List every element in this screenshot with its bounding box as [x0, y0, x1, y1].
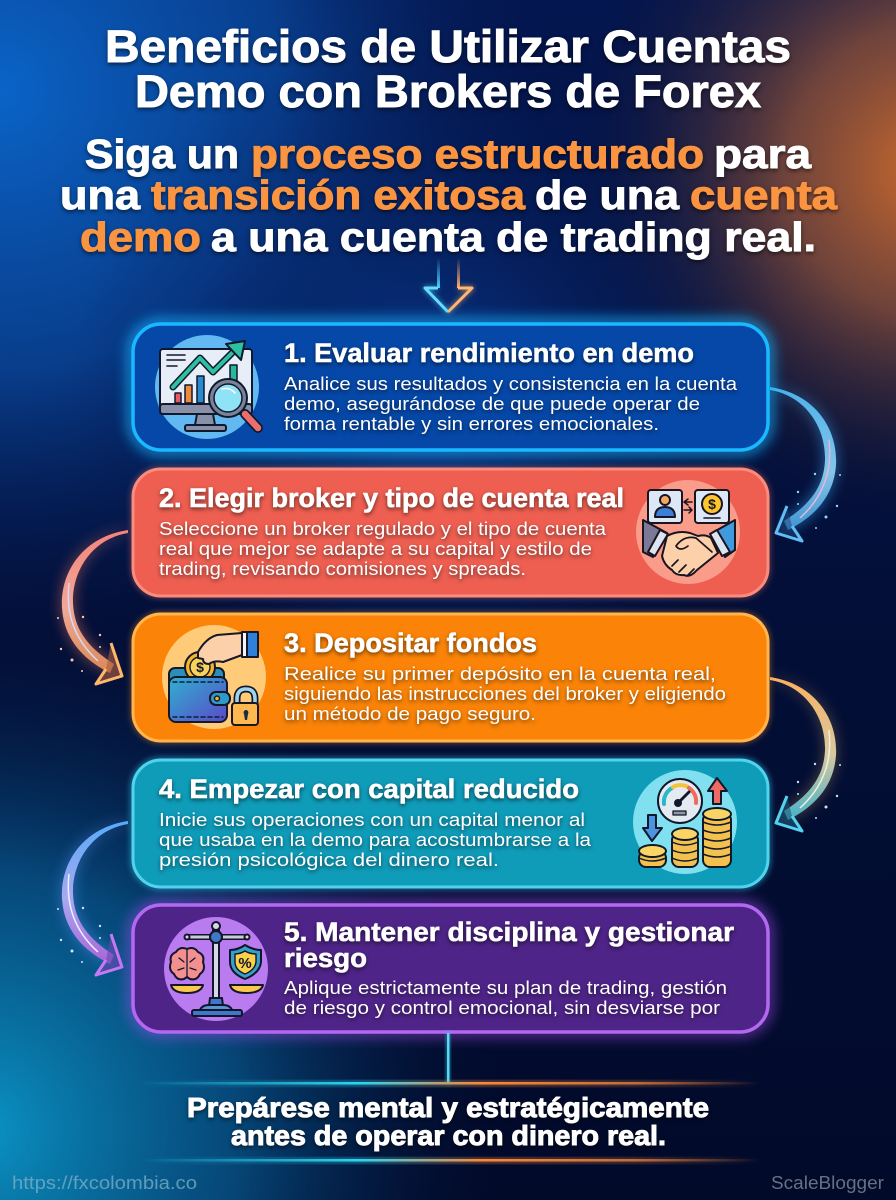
rule above conclusion [140, 1081, 760, 1086]
conclusion text: Prepárese mental y estratégicamente [187, 1092, 709, 1123]
icon: gauge and coin stacks [633, 770, 737, 874]
step 4 text: presión psicológica del dinero real. [159, 849, 499, 870]
panel: step 1 evaluar rendimiento [133, 324, 768, 450]
step 1 text: forma rentable y sin errores emocionales. [284, 413, 659, 434]
arrow: step 2 to step 3 [57, 530, 128, 684]
icon: balance scale with brain and shield [164, 917, 268, 1021]
step 5 text: riesgo [284, 943, 367, 973]
arrow: step 1 to step 2 [770, 387, 841, 541]
panel: step 5 mantener disciplina [133, 905, 768, 1032]
subtitle: a una cuenta de trading real. [211, 214, 816, 260]
title: Demo con Brokers de Forex [135, 66, 761, 117]
step 3 text: siguiendo las instrucciones del broker y eligiendo [284, 683, 726, 704]
step 3 text: Realice su primer depósito en la cuenta real, [284, 663, 716, 684]
coin stack tall [703, 808, 731, 867]
arrow: step 4 to step 5 [57, 821, 128, 975]
step 3 text: 3. Depositar fondos [284, 628, 537, 658]
step 2 text: trading, revisando comisiones y spreads. [159, 558, 526, 579]
coin stack short [639, 845, 666, 867]
step 5 text: Aplique estrictamente su plan de trading, gestión [284, 977, 727, 998]
step 1 text [284, 338, 738, 434]
connector line [446, 1033, 450, 1083]
step 4 text [159, 774, 592, 870]
step 2 text: 2. Elegir broker y tipo de cuenta real [159, 483, 624, 513]
step 3 text [284, 628, 726, 724]
step 2 text [159, 483, 624, 579]
title [105, 21, 791, 117]
step 4 text: 4. Empezar con capital reducido [159, 774, 579, 804]
title: Beneficios de Utilizar Cuentas [105, 21, 791, 72]
rule below conclusion [140, 1158, 760, 1163]
conclusion text: antes de operar con dinero real. [231, 1120, 666, 1151]
subtitle: una [60, 172, 141, 218]
step 5 text: 5. Mantener disciplina y gestionar [284, 917, 735, 947]
panel: step 2 elegir broker [133, 469, 768, 596]
subtitle: demo [80, 214, 201, 260]
icon: wallet, coin and lock: $ [196, 659, 204, 675]
conclusion text [187, 1092, 709, 1151]
icon: wallet, coin and lock [162, 625, 266, 729]
panel: step 4 empezar con capital reducido [133, 760, 768, 887]
step 2 text: real que mejor se adapte a su capital y estilo de [159, 538, 592, 559]
subtitle: cuenta [690, 172, 838, 218]
icon: balance scale with brain and shield: % [238, 955, 252, 972]
brand: ScaleBlogger [771, 1173, 884, 1193]
coin stack medium [672, 828, 698, 867]
step 1 text: 1. Evaluar rendimiento en demo [284, 338, 694, 368]
icon: handshake [636, 480, 740, 584]
step 2 text: Seleccione un broker regulado y el tipo de cuenta [159, 518, 607, 539]
step 5 text [284, 917, 735, 1018]
step 3 text: un método de pago seguro. [284, 703, 536, 724]
panel: step 3 depositar fondos [133, 614, 768, 741]
step 5 text: de riesgo y control emocional, sin desviarse por [284, 997, 720, 1018]
subtitle: proceso estructurado [251, 131, 704, 177]
subtitle: Siga un [85, 131, 239, 177]
subtitle: de una [535, 172, 680, 218]
step 1 text: Analice sus resultados y consistencia en la cuenta [284, 373, 738, 394]
step 1 text: demo, asegurándose de que puede operar de [284, 393, 700, 414]
arrow: down to first step [425, 258, 472, 312]
icon: monitor with chart and magnifier [155, 335, 259, 439]
icon: handshake: $ [708, 496, 716, 512]
step 4 text: Inicie sus operaciones con un capital menor al [159, 809, 585, 830]
subtitle [60, 131, 838, 260]
source url: https://fxcolombia.co [12, 1173, 197, 1193]
subtitle: transición exitosa [151, 172, 526, 218]
subtitle: para [714, 131, 812, 177]
step 4 text: que usaba en la demo para acostumbrarse a la [159, 829, 592, 850]
arrow: step 3 to step 4 [770, 677, 841, 831]
